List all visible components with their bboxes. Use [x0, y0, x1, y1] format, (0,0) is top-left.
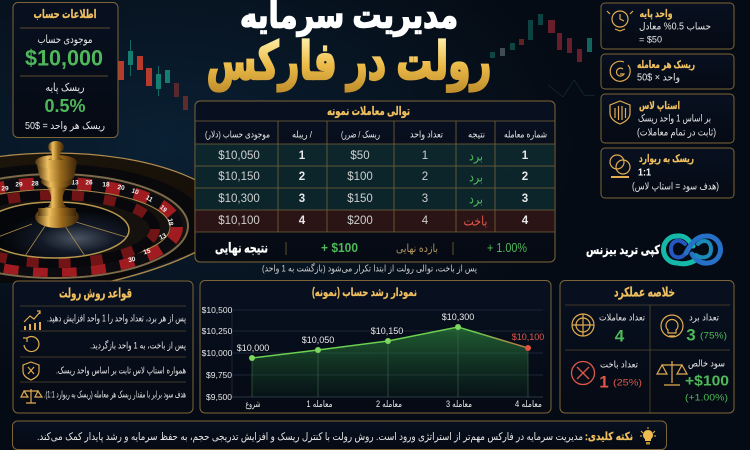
panel: account growth chart: [200, 280, 551, 413]
panel: risk per trade: [601, 54, 734, 89]
point labels: $10,150: [371, 326, 403, 336]
y axis labels: $9,500: [206, 392, 232, 402]
icon: shield: [610, 101, 630, 124]
panel: base unit: = $50: [639, 34, 662, 46]
icon: linked circles: [610, 155, 630, 177]
table rows: 4: [522, 215, 529, 227]
y axis labels: [202, 305, 233, 402]
table caption: پس از باخت، توالی رولت از ابتدا تکرار می‌شود (بازگشت به 1 واحد): [262, 262, 477, 274]
rule 1: پس از هر برد، تعداد واحد را 1 واحد افزایش دهید.: [47, 314, 186, 324]
wheel numbers: 20: [117, 184, 125, 192]
stat: losses: (25%): [613, 378, 642, 388]
icon: light bulb: [640, 427, 656, 444]
panel: roulette rules: [13, 281, 193, 413]
wheel numbers: 18: [102, 182, 110, 188]
wheel numbers: 28: [31, 180, 39, 188]
stat: wins: 3: [686, 326, 696, 344]
table header: شماره معامله: [504, 130, 547, 140]
table rows: $10,150: [218, 171, 260, 183]
panel: base unit: حساب 0.5% معادل: [639, 22, 711, 32]
panel: risk to reward: ریسک به ریوارد: [639, 153, 694, 165]
panel: risk to reward: 1:1: [638, 168, 651, 178]
table rows: 2: [422, 171, 428, 183]
table header: ریسک / ضرر): [341, 130, 380, 140]
x axis labels: معامله 4: [515, 399, 542, 409]
title: [206, 0, 492, 92]
table rows: $10,300: [218, 193, 260, 205]
panel: account info: اطلاعات حساب: [34, 7, 96, 21]
x axis labels: معامله 2: [376, 399, 402, 409]
rule 2: [23, 337, 186, 352]
wheel numbers: 30: [128, 256, 137, 264]
wheel numbers: 13: [158, 232, 168, 242]
stat: total trades: تعداد معاملات: [599, 312, 645, 324]
panel: stop loss: [601, 94, 734, 143]
y axis labels: $10,000: [202, 348, 233, 358]
wheel numbers: 10: [130, 188, 140, 197]
wheel numbers: 15: [142, 247, 152, 256]
x axis labels: [246, 399, 542, 409]
table rows: 2: [299, 171, 305, 183]
x axis labels: شروع: [246, 399, 260, 409]
wheel numbers: 18: [166, 218, 174, 227]
table rows: برد: [469, 192, 483, 208]
stat: net profit: [657, 358, 729, 404]
panel: performance summary: خلاصه عملکرد: [614, 284, 675, 300]
panel: account info: 0.5%: [44, 96, 86, 116]
panel: roulette rules: قواعد روش رولت: [59, 286, 132, 300]
table rows: $10,100: [218, 215, 260, 227]
table header: موجودی حساب (دلار): [205, 130, 270, 140]
panel: account info: [13, 2, 118, 138]
title line 2: رولت در فارکس: [206, 33, 492, 92]
callout: key note: نکته کلیدی:: [585, 431, 633, 443]
point labels: $10,050: [302, 335, 334, 345]
table rows: $150: [347, 193, 373, 205]
table rows: 4: [422, 215, 429, 227]
panel: risk to reward: (هدف سود = استاپ لاس): [632, 182, 719, 192]
table rows: 2: [522, 171, 528, 183]
stat: total trades: 4: [615, 326, 625, 346]
panel: sample trade sequence table: [195, 101, 555, 262]
table rows: 3: [299, 193, 305, 205]
background candlesticks: [98, 14, 595, 110]
table rows: 1: [522, 150, 529, 162]
table rows: 1: [422, 150, 428, 162]
panel: performance summary: [560, 280, 734, 413]
area and line: [249, 324, 531, 397]
table rows: $100: [347, 171, 373, 183]
wheel turret: [35, 141, 79, 228]
roulette wheel: [0, 141, 194, 283]
x axis labels: معامله 1: [306, 399, 333, 409]
table footer: بازده نهایی: [396, 243, 438, 255]
stat: net profit: +$100: [685, 372, 729, 390]
stat: wins: (75%): [700, 330, 727, 342]
table rows: 3: [422, 193, 428, 205]
table title: توالی معاملات نمونه: [327, 104, 410, 119]
rule 3: همواره استاپ لاس ثابت بر اساس واحد ریسک.: [56, 366, 186, 376]
table rows: 1: [299, 150, 306, 162]
panel: risk per trade: واحد × $50: [637, 72, 680, 84]
stat: total trades: [572, 312, 645, 346]
icon: clock target: [607, 11, 633, 31]
panel: account info: ریسک پایه: [46, 82, 84, 94]
table rows: 3: [522, 193, 528, 205]
table header: نتیجه: [468, 130, 485, 140]
table rows: [195, 121, 555, 232]
logo: [586, 236, 721, 264]
y axis labels: $10,500: [202, 305, 233, 315]
table footer: + $100: [321, 241, 358, 255]
rule 3: [23, 362, 186, 380]
table footer: [215, 240, 527, 256]
rule 4: [21, 389, 186, 403]
table header: [205, 130, 547, 140]
rule 4: هدف سود برابر با مقدار ریسک هر معامله (ریسک به ریوارد 1:1).: [44, 390, 186, 400]
y axis labels: $9,750: [206, 370, 232, 380]
point labels: [237, 312, 544, 353]
panel: risk to reward: [601, 148, 734, 198]
x axis labels: معامله 3: [446, 399, 472, 409]
table footer: + 1.00%: [487, 241, 527, 255]
callout: key note: مدیریت سرمایه در فارکس مهم‌تر از استراتژی ورود است. روش رولت با کنترل ریسک و افزایش تدریجی حجم، به حفظ سرمایه و رشد پایدار کمک می‌کند.: [37, 431, 583, 443]
logo text: کپی ترید بیزنس: [586, 243, 661, 257]
wheel numbers: 19: [158, 204, 168, 214]
panel: stop loss: بر اساس 1 واحد ریسک: [638, 114, 711, 124]
table header: تعداد واحد: [410, 130, 443, 140]
icon: risk dial: [610, 61, 630, 81]
logo mark: [664, 236, 721, 264]
panel: stop loss: (ثابت در تمام معاملات): [637, 128, 716, 138]
stat: wins: [661, 312, 727, 344]
panel: base unit: واحد پایه: [640, 8, 672, 20]
wheel numbers: 11: [144, 194, 154, 204]
table rows: $10,050: [218, 150, 260, 162]
wheel numbers: 13: [71, 180, 79, 186]
point labels: $10,100: [512, 332, 544, 342]
table rows: $50: [350, 150, 370, 162]
stat: wins: تعداد برد: [689, 312, 719, 324]
table header: / ریبله: [292, 130, 312, 140]
wheel numbers: [1, 180, 174, 264]
rule 1: [24, 311, 186, 330]
stat: losses: 1: [599, 372, 609, 392]
wheel numbers: 26: [85, 180, 93, 186]
stat: losses: [572, 360, 642, 392]
rule 2: پس از باخت، به 1 واحد بازگردید.: [90, 340, 186, 352]
panel: stop loss: استاپ لاس: [639, 100, 680, 112]
table rows: 4: [299, 215, 306, 227]
panel: account info: $10,000: [25, 46, 103, 70]
point labels: $10,000: [237, 343, 269, 353]
panel: account info: ریسک هر واحد = $50: [25, 120, 105, 132]
stat: net profit: (+1.00%): [685, 392, 728, 404]
wheel numbers: 29: [1, 186, 9, 192]
stat: net profit: سود خالص: [688, 358, 725, 370]
panel: account info: موجودی حساب: [38, 34, 93, 46]
panel: risk per trade: ریسک هر معامله: [637, 59, 695, 71]
stat: losses: تعداد باخت: [600, 360, 638, 370]
point labels: $10,300: [442, 312, 474, 322]
table rows: $200: [347, 215, 373, 227]
y axis labels: $10,250: [202, 326, 233, 336]
table rows: باخت: [464, 214, 488, 228]
grid lines: [232, 310, 543, 397]
table rows: برد: [469, 170, 483, 186]
chart title: نمودار رشد حساب (نمونه): [312, 287, 417, 300]
panel: base unit: [601, 3, 734, 49]
table footer: نتیجه نهایی: [215, 240, 268, 256]
table rows: برد: [469, 148, 483, 164]
wheel numbers: 29: [15, 182, 23, 188]
callout: key note: [12, 421, 666, 450]
